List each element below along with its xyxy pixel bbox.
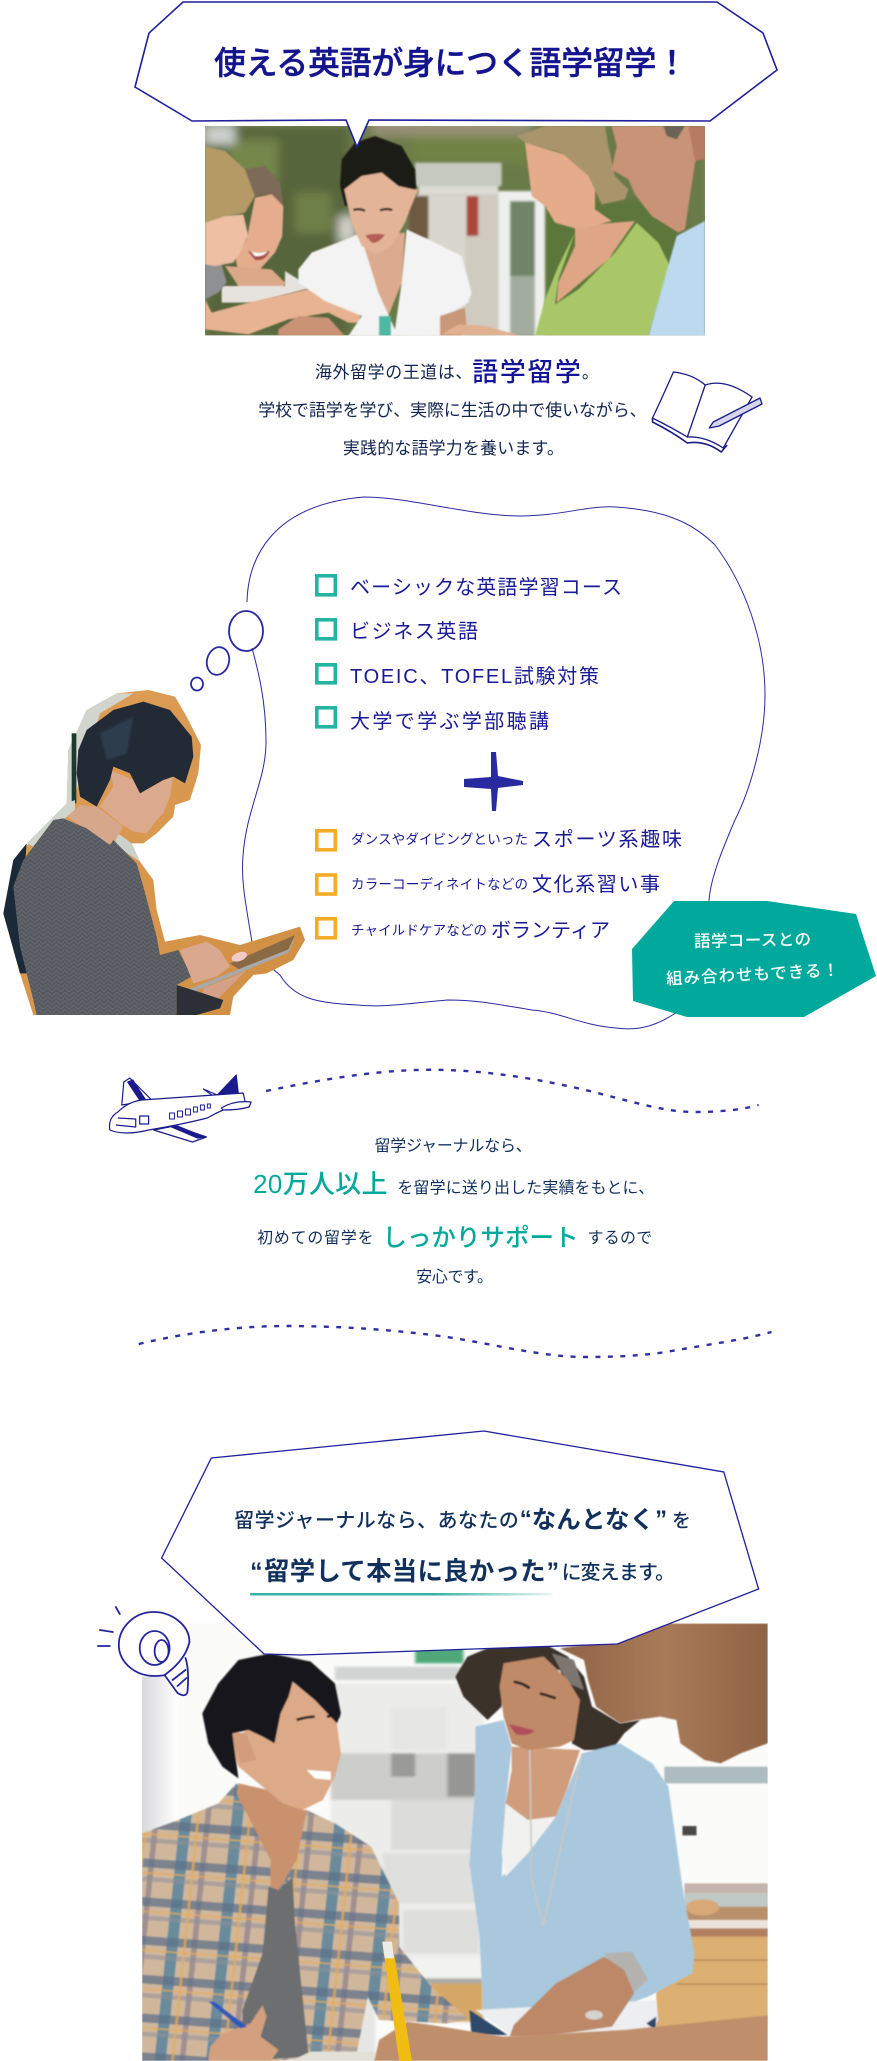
support text block: 20万人以上 xyxy=(253,1170,387,1199)
message text: 留学ジャーナルなら、あなたの xyxy=(234,1509,519,1532)
intro text block: 語学留学 xyxy=(472,358,581,387)
hobby items: 文化系習い事 xyxy=(532,873,660,896)
intro text block: 学校で語学を学び、実際に生活の中で使いながら、 xyxy=(258,400,647,420)
intro text block: 海外留学の王道は、 xyxy=(315,363,472,382)
speech bubble: reassurance message xyxy=(162,1431,759,1655)
poster and back wall xyxy=(331,1647,484,2053)
course items: ビジネス英語 xyxy=(350,620,478,643)
message text: を xyxy=(672,1511,691,1532)
support text block: するので xyxy=(587,1229,652,1247)
hobby items: ダンスやダイビングといった xyxy=(351,832,528,847)
message text: なんとなく xyxy=(532,1507,654,1534)
woman in white blouse xyxy=(298,136,472,336)
icon: airplane xyxy=(110,1075,251,1142)
callout: teal badge: 語学コースとの xyxy=(694,930,811,951)
orange checkboxes xyxy=(317,831,335,938)
dashed divider xyxy=(139,1326,772,1357)
intro text block xyxy=(258,358,647,458)
support text block: 留学ジャーナルなら、 xyxy=(375,1137,532,1155)
support text block: しっかりサポート xyxy=(382,1225,578,1252)
intro text block: 。 xyxy=(582,363,599,382)
hands xyxy=(180,942,230,983)
photo: family group xyxy=(198,119,712,343)
panel: thought cloud xyxy=(191,497,765,1029)
course items: ベーシックな英語学習コース xyxy=(350,576,622,599)
icon: plus sign xyxy=(464,752,523,811)
title: 使える英語が身につく語学留学！ xyxy=(214,45,688,81)
sweater xyxy=(13,818,192,1015)
garden background xyxy=(198,119,712,343)
message text: に変えます。 xyxy=(562,1561,675,1584)
hobby items: カラーコーディネイトなどの xyxy=(351,876,528,892)
callout: teal badge: 組み合わせもできる！ xyxy=(666,961,839,989)
support text block: 安心です。 xyxy=(416,1268,493,1286)
foreground student xyxy=(374,1623,772,2061)
course items: 大学で学ぶ学部聴講 xyxy=(350,710,549,733)
boy xyxy=(205,146,360,336)
hobby items: チャイルドケアなどの xyxy=(351,923,487,938)
woman in green top xyxy=(442,126,670,336)
window and cabinets xyxy=(656,1767,772,2030)
icon: open book and pencil xyxy=(653,372,762,452)
list: hobby options xyxy=(317,828,682,942)
course items xyxy=(350,576,622,733)
support text block: を留学に送り出した実績をもとに、 xyxy=(397,1179,654,1197)
man in plaid shirt xyxy=(142,1653,467,2061)
message text xyxy=(234,1506,691,1586)
neck xyxy=(67,805,123,843)
man in blue shirt xyxy=(612,126,705,336)
photo: classroom xyxy=(142,1620,772,2061)
face xyxy=(100,770,173,833)
message text: “ xyxy=(520,1506,532,1533)
title speech bubble xyxy=(135,2,777,147)
photo: student with tablet xyxy=(3,690,305,1015)
cloud outline xyxy=(242,497,765,1029)
dashed flight path xyxy=(266,1070,759,1112)
tablet xyxy=(230,935,295,970)
hair xyxy=(77,702,193,807)
hobby items xyxy=(351,828,682,942)
teal checkboxes xyxy=(317,576,335,727)
support text block xyxy=(253,1137,654,1286)
girl xyxy=(222,166,312,303)
thought bubbles xyxy=(191,611,263,690)
intro text block: 実践的な語学力を養います。 xyxy=(343,439,564,458)
support text block: 初めての留学を xyxy=(257,1229,374,1247)
message text: 留学して本当に良かった xyxy=(264,1558,546,1586)
message text: “ xyxy=(250,1558,263,1586)
icon: light bulb xyxy=(98,1607,189,1695)
callout: teal badge xyxy=(632,901,876,1017)
course items: TOEIC、TOFEL試験対策 xyxy=(350,665,599,688)
message text: ” xyxy=(655,1506,667,1533)
pencil xyxy=(382,1942,412,2061)
hobby items: ボランティア xyxy=(491,919,610,942)
teal underline xyxy=(250,1593,553,1596)
woman teacher xyxy=(455,1643,694,2037)
list: courses xyxy=(317,576,622,733)
message text: ” xyxy=(547,1558,559,1586)
hobby items: スポーツ系趣味 xyxy=(532,828,682,851)
